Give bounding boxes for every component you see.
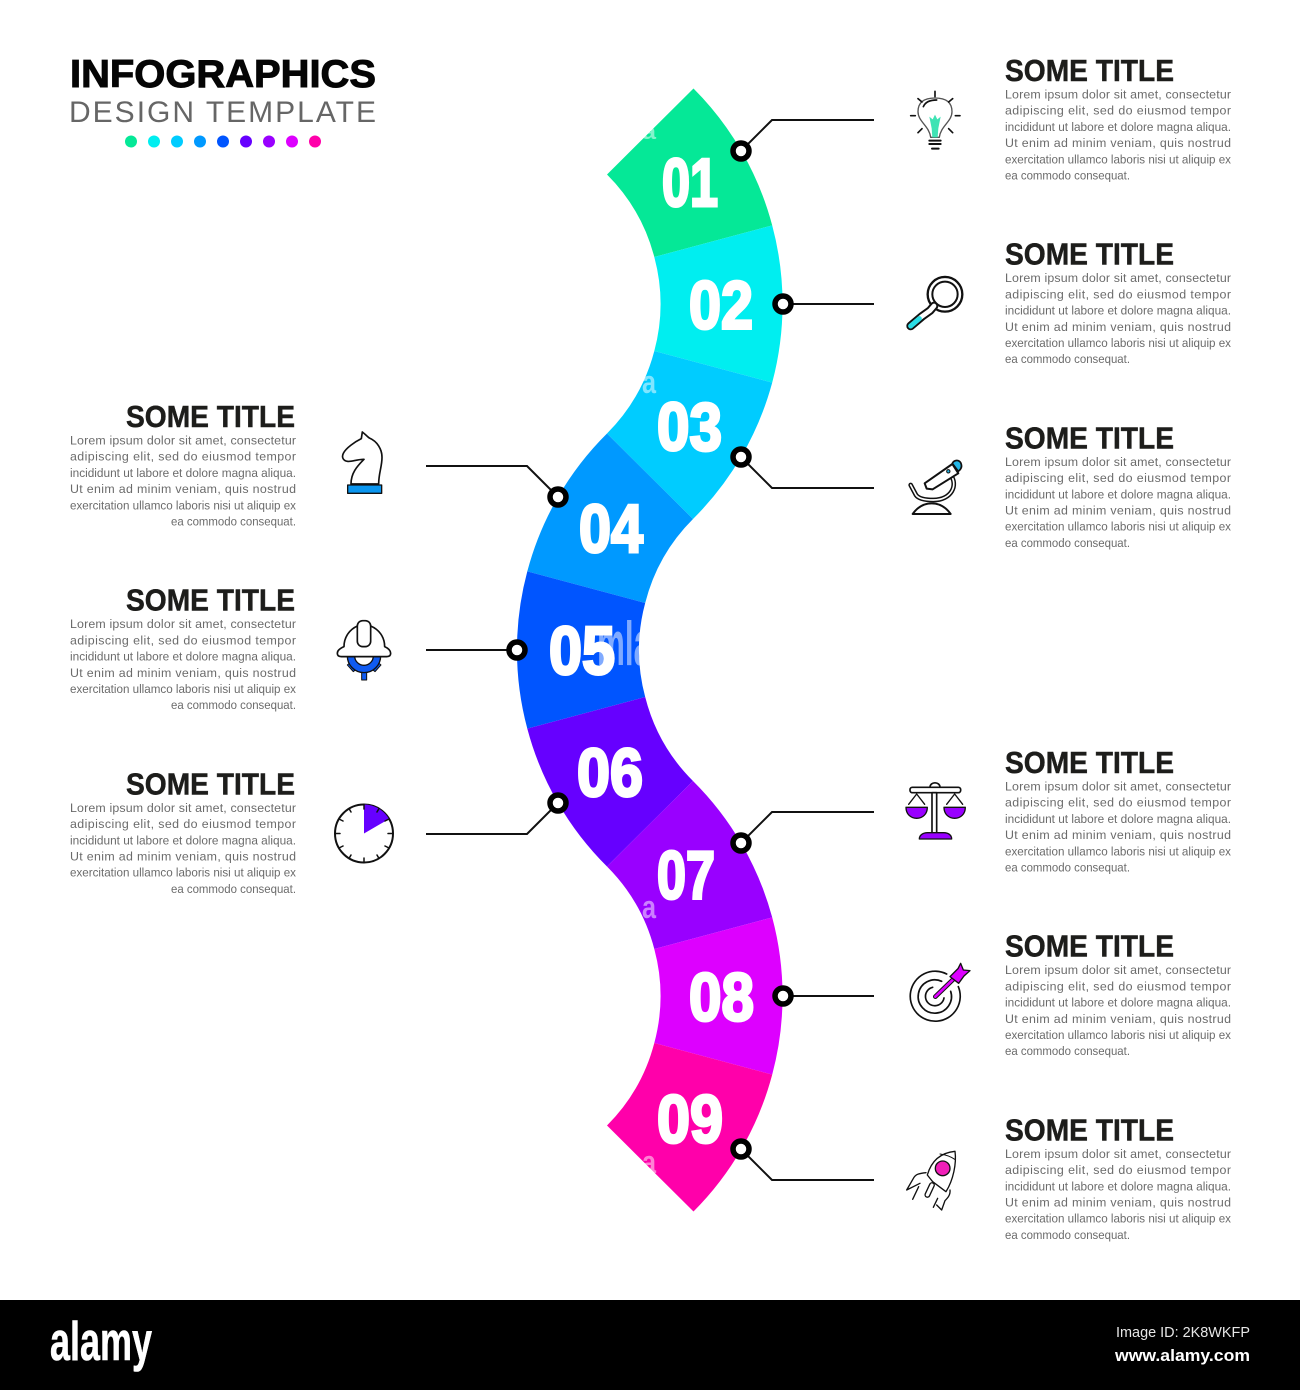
watermark fragments: a bbox=[642, 889, 656, 925]
segment 02 bbox=[654, 225, 783, 383]
text block 09: adipiscing elit, sed do eiusmod tempor bbox=[1005, 1163, 1231, 1177]
number 05: 05 bbox=[549, 613, 615, 689]
watermark fragments: a bbox=[642, 119, 657, 144]
icon: hard hat with gear bbox=[337, 621, 391, 680]
text block 07: adipiscing elit, sed do eiusmod tempor bbox=[1005, 796, 1231, 810]
number 09: 09 bbox=[657, 1082, 723, 1158]
watermark fragments: mla bbox=[597, 610, 651, 679]
text block 07: incididunt ut labore et dolore magna aliqua. bbox=[1005, 812, 1231, 826]
text block 06: incididunt ut labore et dolore magna aliqua. bbox=[70, 833, 296, 847]
segment 08 bbox=[654, 917, 783, 1075]
icon: microscope bbox=[911, 460, 961, 514]
connector 09 bbox=[733, 1141, 874, 1180]
title: INFOGRAPHICS bbox=[70, 53, 376, 96]
text block 02: adipiscing elit, sed do eiusmod tempor bbox=[1005, 287, 1231, 301]
number 03: 03 bbox=[657, 389, 722, 465]
text block 04: exercitation ullamco laboris nisi ut aliquip ex bbox=[70, 498, 297, 512]
text block 06: SOME TITLE bbox=[126, 766, 295, 801]
segment 05 bbox=[517, 571, 645, 729]
text block 06: Ut enim ad minim veniam, quis nostrud bbox=[70, 850, 296, 864]
number 02: 02 bbox=[689, 268, 753, 344]
icon: rocket bbox=[907, 1151, 955, 1210]
number 07: 07 bbox=[657, 838, 715, 914]
icon: chess knight bbox=[343, 432, 382, 493]
text block 04: SOME TITLE bbox=[126, 399, 295, 434]
connector 06 bbox=[426, 795, 566, 834]
text block 08: Ut enim ad minim veniam, quis nostrud bbox=[1005, 1012, 1231, 1026]
connector 02 bbox=[775, 296, 874, 312]
icon: magnifying glass bbox=[911, 277, 962, 326]
text block 08: SOME TITLE bbox=[1005, 929, 1174, 964]
text block 08: ea commodo consequat. bbox=[1005, 1044, 1130, 1058]
text block 07: exercitation ullamco laboris nisi ut aliquip ex bbox=[1005, 844, 1232, 858]
subtitle: DESIGN TEMPLATE bbox=[69, 96, 376, 129]
text block 06 bbox=[70, 766, 297, 896]
footer logo: alamy bbox=[50, 1310, 152, 1372]
text block 03: ea commodo consequat. bbox=[1005, 536, 1130, 550]
watermark fragments: a bbox=[642, 1144, 656, 1180]
image id: Image ID: 2K8WKFP bbox=[1116, 1324, 1250, 1341]
text block 01: Lorem ipsum dolor sit amet, consectetur bbox=[1005, 88, 1231, 102]
text block 02: Ut enim ad minim veniam, quis nostrud bbox=[1005, 320, 1231, 334]
text block 09 bbox=[1005, 1112, 1232, 1242]
text block 01 bbox=[1005, 53, 1232, 182]
text block 05: ea commodo consequat. bbox=[171, 698, 296, 712]
icon: clock with purple sector bbox=[335, 804, 393, 862]
text block 02: Lorem ipsum dolor sit amet, consectetur bbox=[1005, 271, 1231, 285]
text block 04: Lorem ipsum dolor sit amet, consectetur bbox=[70, 434, 296, 448]
text block 07: Lorem ipsum dolor sit amet, consectetur bbox=[1005, 780, 1231, 794]
text block 08: incididunt ut labore et dolore magna aliqua. bbox=[1005, 996, 1231, 1010]
header: title and colour dots bbox=[69, 53, 376, 148]
text block 09: incididunt ut labore et dolore magna aliqua. bbox=[1005, 1179, 1231, 1193]
text block 08: exercitation ullamco laboris nisi ut aliquip ex bbox=[1005, 1028, 1232, 1042]
text block 04: incididunt ut labore et dolore magna aliqua. bbox=[70, 466, 296, 480]
winding ribbon with nine numbered segments bbox=[517, 88, 783, 1212]
text block 05: SOME TITLE bbox=[126, 583, 295, 618]
connector 05 bbox=[426, 642, 525, 658]
text block 06: ea commodo consequat. bbox=[171, 882, 296, 896]
text block 02 bbox=[1005, 237, 1232, 366]
text block 03: SOME TITLE bbox=[1005, 420, 1174, 455]
text block 03: adipiscing elit, sed do eiusmod tempor bbox=[1005, 471, 1231, 485]
text block 04 bbox=[70, 399, 297, 528]
text block 07: SOME TITLE bbox=[1005, 745, 1174, 780]
icon: balance scales bbox=[906, 783, 965, 839]
text block 04: Ut enim ad minim veniam, quis nostrud bbox=[70, 482, 296, 496]
watermark fragments: a bbox=[642, 364, 656, 400]
text block 09: SOME TITLE bbox=[1005, 1112, 1174, 1147]
text block 05: exercitation ullamco laboris nisi ut aliquip ex bbox=[70, 682, 297, 696]
text block 01: Ut enim ad minim veniam, quis nostrud bbox=[1005, 136, 1231, 150]
text block 08 bbox=[1005, 929, 1232, 1058]
text block 05 bbox=[70, 583, 297, 712]
text block 07: Ut enim ad minim veniam, quis nostrud bbox=[1005, 828, 1231, 842]
text block 09: Ut enim ad minim veniam, quis nostrud bbox=[1005, 1196, 1231, 1210]
text block 03: Lorem ipsum dolor sit amet, consectetur bbox=[1005, 455, 1231, 469]
number 08: 08 bbox=[689, 960, 754, 1036]
website: www.alamy.com bbox=[1114, 1347, 1250, 1365]
text block 02: ea commodo consequat. bbox=[1005, 352, 1130, 366]
text block 08: adipiscing elit, sed do eiusmod tempor bbox=[1005, 979, 1231, 993]
number 01: 01 bbox=[662, 145, 718, 221]
text block 01: adipiscing elit, sed do eiusmod tempor bbox=[1005, 104, 1231, 118]
number 04: 04 bbox=[579, 491, 643, 567]
segment 03 bbox=[607, 351, 772, 519]
text block 05: Lorem ipsum dolor sit amet, consectetur bbox=[70, 617, 296, 631]
text block 03: Ut enim ad minim veniam, quis nostrud bbox=[1005, 504, 1231, 518]
text block 02: exercitation ullamco laboris nisi ut aliquip ex bbox=[1005, 336, 1232, 350]
connector 01 bbox=[733, 120, 874, 159]
connector 07 bbox=[733, 812, 874, 851]
segment 09 bbox=[607, 1043, 772, 1212]
segment 06 bbox=[527, 697, 693, 866]
colour dots row bbox=[125, 136, 321, 148]
text block 07: ea commodo consequat. bbox=[1005, 860, 1130, 874]
segment 01 bbox=[607, 88, 772, 257]
text block 03 bbox=[1005, 420, 1232, 550]
connector 04 bbox=[426, 466, 566, 505]
icon: light bulb bbox=[911, 91, 960, 149]
text block 09: ea commodo consequat. bbox=[1005, 1228, 1130, 1242]
text block 04: ea commodo consequat. bbox=[171, 514, 296, 528]
watermark fragments bbox=[597, 119, 657, 1180]
text block 06: adipiscing elit, sed do eiusmod tempor bbox=[70, 817, 296, 831]
text block 04: adipiscing elit, sed do eiusmod tempor bbox=[70, 450, 296, 464]
text block 08: Lorem ipsum dolor sit amet, consectetur bbox=[1005, 963, 1231, 977]
text block 01: ea commodo consequat. bbox=[1005, 168, 1130, 182]
text block 02: SOME TITLE bbox=[1005, 237, 1174, 272]
text block 01: exercitation ullamco laboris nisi ut aliquip ex bbox=[1005, 152, 1232, 166]
text block 05: adipiscing elit, sed do eiusmod tempor bbox=[70, 633, 296, 647]
text block 09: Lorem ipsum dolor sit amet, consectetur bbox=[1005, 1147, 1231, 1161]
text block 03: exercitation ullamco laboris nisi ut aliquip ex bbox=[1005, 520, 1232, 534]
text block 06: exercitation ullamco laboris nisi ut aliquip ex bbox=[70, 866, 297, 880]
segment 04 bbox=[527, 434, 693, 603]
text block 01: incididunt ut labore et dolore magna aliqua. bbox=[1005, 120, 1231, 134]
text block 03: incididunt ut labore et dolore magna aliqua. bbox=[1005, 487, 1231, 501]
text block 06: Lorem ipsum dolor sit amet, consectetur bbox=[70, 801, 296, 815]
segment 07 bbox=[607, 781, 772, 949]
connector 08 bbox=[775, 988, 874, 1004]
text block 09: exercitation ullamco laboris nisi ut aliquip ex bbox=[1005, 1212, 1232, 1226]
text block 05: incididunt ut labore et dolore magna aliqua. bbox=[70, 650, 296, 664]
connector 03 bbox=[733, 449, 874, 488]
text block 02: incididunt ut labore et dolore magna aliqua. bbox=[1005, 304, 1231, 318]
footer bar bbox=[0, 1300, 1300, 1390]
icon: target with arrow bbox=[910, 963, 970, 1021]
text block 05: Ut enim ad minim veniam, quis nostrud bbox=[70, 666, 296, 680]
text block 07 bbox=[1005, 745, 1232, 874]
number 06: 06 bbox=[577, 735, 643, 811]
text block 01: SOME TITLE bbox=[1005, 53, 1174, 88]
